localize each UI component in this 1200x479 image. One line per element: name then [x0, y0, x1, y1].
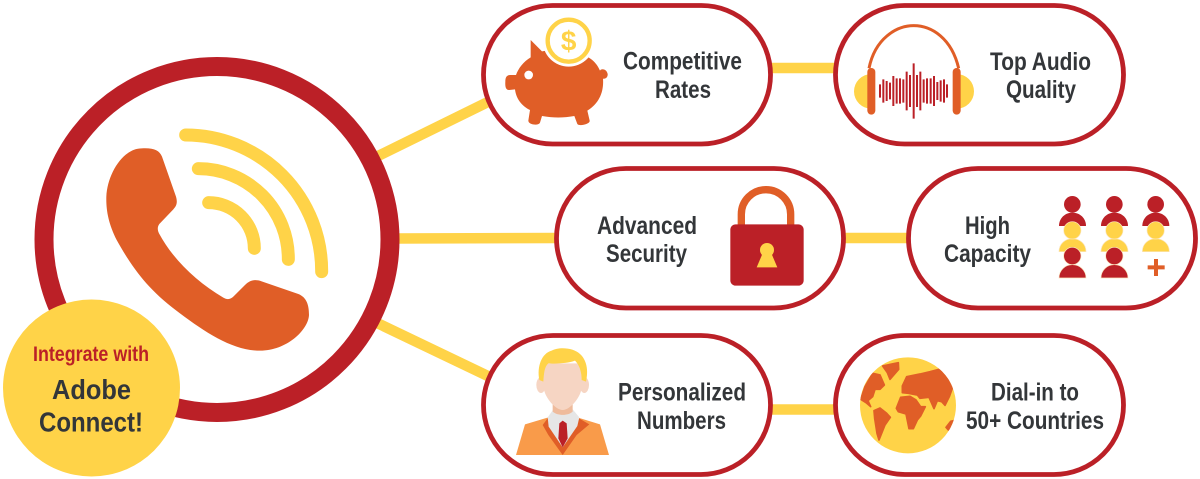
label: advanced security: Security — [606, 240, 687, 268]
label: top audio quality — [990, 48, 1091, 104]
connector lines — [375, 68, 909, 410]
label: high capacity — [944, 212, 1031, 268]
label: top audio quality: Top Audio — [990, 48, 1091, 76]
icon: piggy bank — [505, 15, 608, 125]
panel: top audio quality — [836, 6, 1124, 144]
dollar sign: $ — [561, 26, 577, 57]
badge: Integrate with Adobe Connect — [3, 300, 180, 476]
icon: phone with signal arcs — [106, 135, 322, 351]
badge line: Adobe: Adobe — [52, 374, 131, 405]
plus sign — [1148, 259, 1165, 276]
label: advanced security: Advanced — [597, 212, 697, 240]
icon: businessman — [516, 348, 609, 455]
main phone ring — [44, 66, 390, 412]
label: high capacity: Capacity — [944, 240, 1031, 268]
label: personalized numbers — [618, 378, 746, 435]
label: dial-in to 50+ countries: Dial-in to — [991, 378, 1079, 406]
icon: headphones with waveform — [854, 26, 974, 119]
phone handset — [106, 148, 309, 351]
panel: advanced security — [556, 168, 844, 308]
badge line: Connect!: Connect! — [39, 406, 143, 438]
signal arcs — [186, 135, 322, 272]
label: advanced security — [597, 212, 697, 268]
badge line: integrate with: Integrate with — [33, 343, 149, 366]
label: competitive rates: Competitive — [623, 48, 742, 76]
label: high capacity: High — [965, 212, 1010, 240]
label: competitive rates: Rates — [655, 76, 711, 104]
label: top audio quality: Quality — [1006, 76, 1076, 104]
label: dial-in to 50+ countries: 50+ Countries — [966, 407, 1104, 435]
waveform — [880, 63, 947, 119]
label: competitive rates — [623, 48, 742, 104]
label: personalized numbers: Numbers — [637, 407, 726, 435]
icon: padlock — [730, 190, 804, 286]
panel: high capacity — [908, 168, 1196, 308]
panel: competitive rates — [484, 6, 770, 144]
label: personalized numbers: Personalized — [618, 378, 746, 406]
label: dial-in to 50+ countries — [966, 378, 1104, 435]
icon: globe — [860, 357, 957, 453]
panel: personalized numbers — [484, 336, 770, 474]
panel: dial-in countries — [836, 336, 1124, 474]
icon: group of people — [1059, 196, 1169, 278]
